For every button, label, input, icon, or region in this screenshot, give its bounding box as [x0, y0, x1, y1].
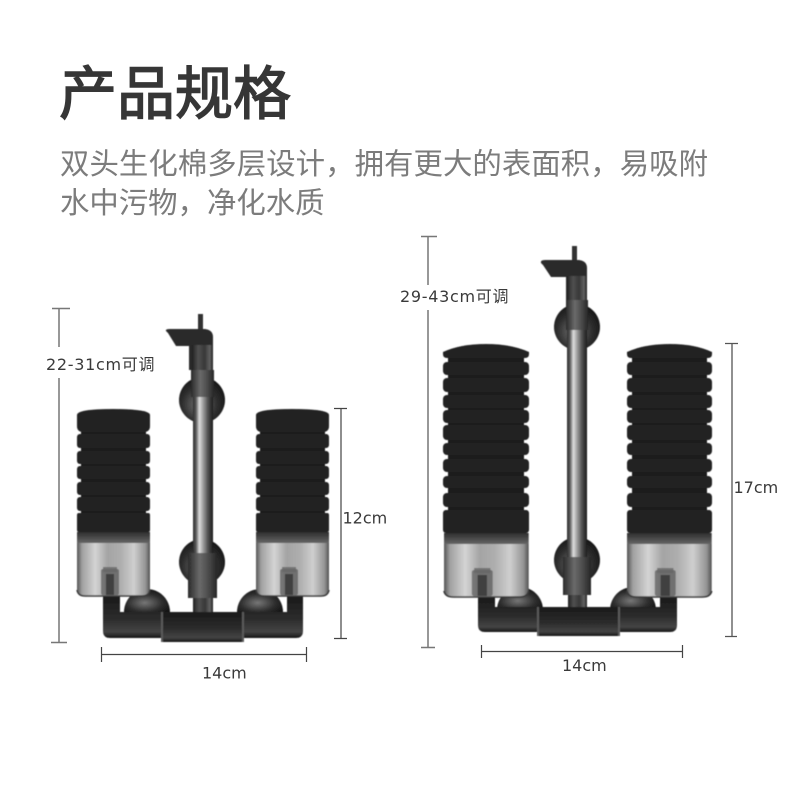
description text: 水中污物，净化水质	[60, 180, 325, 222]
height dimension 12cm: 12cm	[342, 508, 387, 528]
base pipe, large filter	[478, 597, 677, 636]
height dimension 29-43cm	[400, 236, 509, 648]
height dimension 17cm: 17cm	[734, 478, 778, 497]
collection cup left, large filter	[444, 533, 529, 597]
sponge left, large filter	[443, 344, 529, 533]
height dimension 12cm	[334, 408, 387, 638]
width dimension 14cm, small filter: 14cm	[202, 664, 247, 682]
height dimension 29-43cm: 29-43cm可调	[400, 283, 509, 307]
description text	[60, 141, 708, 222]
collection cup right, large filter	[627, 533, 712, 597]
sponge right, small filter	[256, 409, 329, 532]
collection cup left, small filter	[77, 532, 150, 596]
title: 产品规格	[59, 47, 291, 131]
width dimension 14cm, large filter	[481, 645, 683, 675]
width dimension 14cm, large filter: 14cm	[562, 656, 607, 675]
description text: 双头生化棉多层设计，拥有更大的表面积，易吸附	[60, 141, 708, 183]
lift tube, large filter	[541, 246, 591, 613]
collection cup right, small filter	[256, 532, 329, 596]
suction cups, small filter	[124, 377, 283, 612]
suction cups, large filter	[497, 304, 656, 610]
base pipe, small filter	[103, 596, 303, 642]
sponge left, small filter	[77, 409, 150, 532]
width dimension 14cm, small filter	[101, 647, 307, 682]
sponge right, large filter	[627, 344, 712, 533]
lift tube, small filter	[166, 314, 217, 616]
height dimension 17cm	[725, 343, 778, 636]
product: small double-head filter	[77, 314, 329, 642]
height dimension 22-31cm: 22-31cm可调	[46, 351, 155, 375]
product: large double-head filter	[443, 246, 712, 636]
height dimension 22-31cm	[46, 308, 155, 642]
